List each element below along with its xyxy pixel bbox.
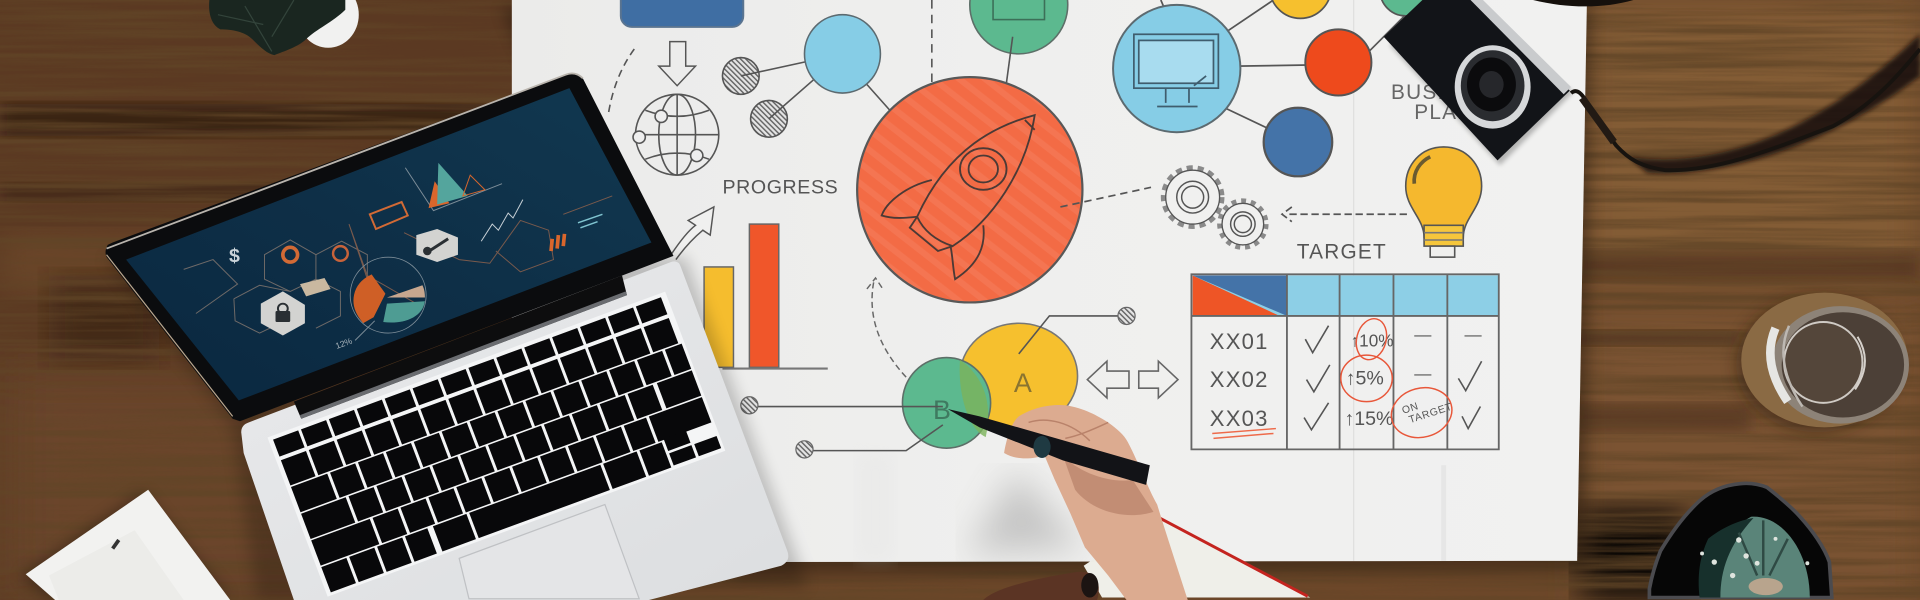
home row <box>306 510 350 526</box>
light blue monitor node <box>1113 5 1240 132</box>
top green node <box>970 0 1068 100</box>
venn diagram A and B: B <box>933 395 951 425</box>
pen <box>948 409 1150 485</box>
table grid <box>1191 274 1499 449</box>
banknote icon <box>370 202 408 229</box>
potted cactus <box>1649 483 1832 598</box>
shift row <box>316 532 375 553</box>
venn diagram A and B <box>741 307 1135 458</box>
row labels: XX03 <box>1210 406 1269 431</box>
screen lid <box>106 73 673 421</box>
laptop shadow <box>104 257 808 600</box>
red annotation circles <box>1341 315 1458 444</box>
business plan label: BUSINESS <box>1391 81 1506 104</box>
plant and white pot, top left <box>209 0 359 55</box>
rocket circle <box>857 77 1082 302</box>
percent values <box>1344 324 1482 430</box>
dashed curve <box>609 49 634 113</box>
row labels: XX01 <box>1210 329 1269 354</box>
percent values: ↑5% <box>1346 367 1384 389</box>
business plan label: PLAN <box>1414 101 1474 124</box>
writing hand <box>948 405 1188 600</box>
triangle chart <box>405 168 502 211</box>
screen display <box>126 88 651 400</box>
percent values: — <box>1414 324 1432 344</box>
check marks <box>1304 326 1482 430</box>
hollow down arrow <box>659 42 696 86</box>
connector lines <box>1161 0 1408 131</box>
lower hand on notebook <box>983 572 1099 600</box>
hand shadow <box>967 471 1084 553</box>
trackpad <box>459 504 639 599</box>
pie chart <box>350 257 426 333</box>
bottom row <box>326 541 432 580</box>
paper sheet <box>502 0 1592 576</box>
table header cells <box>1193 276 1499 316</box>
hatched nodes and light blue node <box>722 15 896 137</box>
top green small node <box>1380 0 1431 16</box>
hexagon network <box>184 240 367 333</box>
percent values: ↑10% <box>1351 331 1393 351</box>
camera <box>1384 0 1573 165</box>
keyboard <box>267 292 725 597</box>
target label: TARGET <box>1297 240 1387 263</box>
qwerty row <box>296 486 332 500</box>
touch icon <box>333 246 348 261</box>
top yellow node <box>1270 0 1331 18</box>
finger nail <box>1033 436 1051 458</box>
venn diagram A and B: A <box>1014 368 1032 398</box>
bar chart <box>704 224 828 369</box>
vertical dashed line <box>931 0 933 105</box>
notebook under hand <box>1084 517 1310 598</box>
blue rounded box <box>621 0 743 27</box>
dashed arrow from bulb to gears <box>1282 207 1407 222</box>
lock hexagon <box>261 291 305 336</box>
monitor node cluster <box>1113 0 1431 176</box>
screen infographic <box>184 163 612 351</box>
coaster with glass of water <box>1736 293 1909 432</box>
percent label: 12% <box>334 335 354 351</box>
laptop base <box>241 261 788 600</box>
lightbulb icon <box>1406 147 1482 257</box>
hinge <box>294 276 627 419</box>
curved progress arrow <box>671 207 714 260</box>
donut icon <box>283 247 298 262</box>
on target note: ON <box>1401 401 1420 417</box>
white box, bottom left <box>21 490 230 600</box>
scale icon <box>578 214 602 228</box>
camera strap <box>1533 0 1920 173</box>
flow diagram: top left <box>609 0 1068 175</box>
dashed connector from rocket to gears <box>1060 187 1151 207</box>
on target note: TARGET <box>1408 402 1454 426</box>
double arrows <box>1087 361 1178 398</box>
row labels: XX02 <box>1210 367 1269 392</box>
function keys <box>276 305 667 448</box>
card icon <box>300 278 331 296</box>
rocket icon <box>882 115 1035 279</box>
target table <box>1191 274 1499 449</box>
small bar icon <box>551 234 564 251</box>
orange node <box>1305 29 1371 96</box>
gears icon <box>1163 168 1266 247</box>
laptop <box>104 73 808 600</box>
globe icon <box>633 94 719 175</box>
dollar icon: $ <box>229 245 240 267</box>
number row <box>286 330 676 473</box>
connector lines and dots <box>751 316 1120 451</box>
percent values: ↑15% <box>1344 408 1393 430</box>
zigzag growth arrow <box>481 200 523 241</box>
dark blue node <box>1264 108 1332 176</box>
row labels <box>1210 329 1269 431</box>
percent values: — <box>1414 364 1432 384</box>
key hexagon <box>416 229 458 262</box>
progress label: PROGRESS <box>722 176 838 198</box>
dashed curve arrow to rocket <box>867 278 906 377</box>
percent values: — <box>1464 324 1482 344</box>
